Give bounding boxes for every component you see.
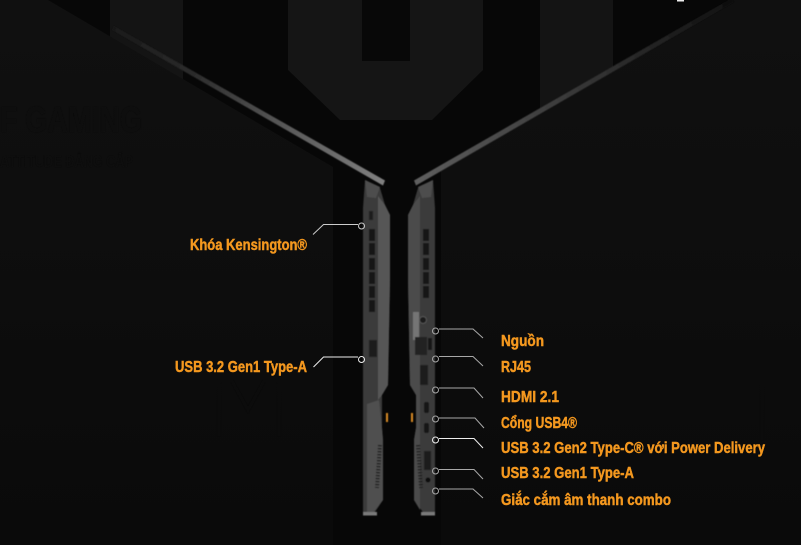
small white mark at top edge [677, 0, 684, 2]
HDMI port [420, 365, 428, 385]
hinge [418, 180, 433, 198]
USB-A port [424, 451, 431, 470]
chassis silhouette [363, 180, 390, 515]
leader: Kensington [313, 223, 364, 234]
leader: audio [432, 488, 483, 498]
label: Kensington lock: Khóa Kensington® [190, 237, 307, 254]
hinge [365, 180, 380, 198]
RJ45 port [415, 337, 427, 355]
leader: RJ45 [432, 356, 483, 366]
faint wallpaper text: F GAMING [0, 99, 142, 140]
right laptop side [408, 180, 435, 516]
light strip [413, 312, 419, 340]
USB-C ports [424, 402, 429, 413]
faint wallpaper text: ATTITUDE ĐẲNG CẤP [0, 152, 133, 171]
leader: USB4 [432, 416, 484, 428]
leader: power [432, 328, 483, 338]
exhaust slits [377, 445, 380, 488]
orange accent [411, 413, 413, 422]
orange accent [386, 413, 388, 422]
label: left USB: USB 3.2 Gen1 Type-A [175, 359, 307, 376]
bottom foot [421, 512, 435, 516]
leader: USB-C [432, 437, 483, 448]
right laptop lid [414, 0, 734, 186]
bottom foot [363, 512, 377, 516]
leader lines [313, 223, 484, 498]
vents [369, 229, 375, 312]
left laptop side [363, 180, 390, 516]
leader: right USB [432, 468, 483, 479]
label: HDMI: HDMI 2.1 [501, 389, 559, 406]
power jack [420, 316, 426, 324]
Kensington lock slot [369, 211, 373, 220]
faint wallpaper text [0, 99, 801, 440]
label: power: Nguồn [501, 333, 544, 350]
audio jack [426, 478, 430, 482]
label: USB4: Cổng USB4® [501, 415, 577, 432]
exhaust slits [418, 445, 421, 488]
USB Type-A port [369, 340, 377, 357]
leader: HDMI [432, 387, 483, 398]
inner light strip [378, 196, 390, 400]
vents [423, 229, 429, 298]
left laptop lid [112, 26, 385, 186]
label: RJ45: RJ45 [501, 359, 531, 376]
lower wedge [367, 400, 383, 513]
leader: left USB [314, 356, 364, 367]
label: audio: Giắc cắm âm thanh combo [501, 491, 671, 509]
inner light strip [408, 196, 420, 510]
label: right USB: USB 3.2 Gen1 Type-A [501, 465, 634, 482]
chassis silhouette [408, 180, 435, 515]
